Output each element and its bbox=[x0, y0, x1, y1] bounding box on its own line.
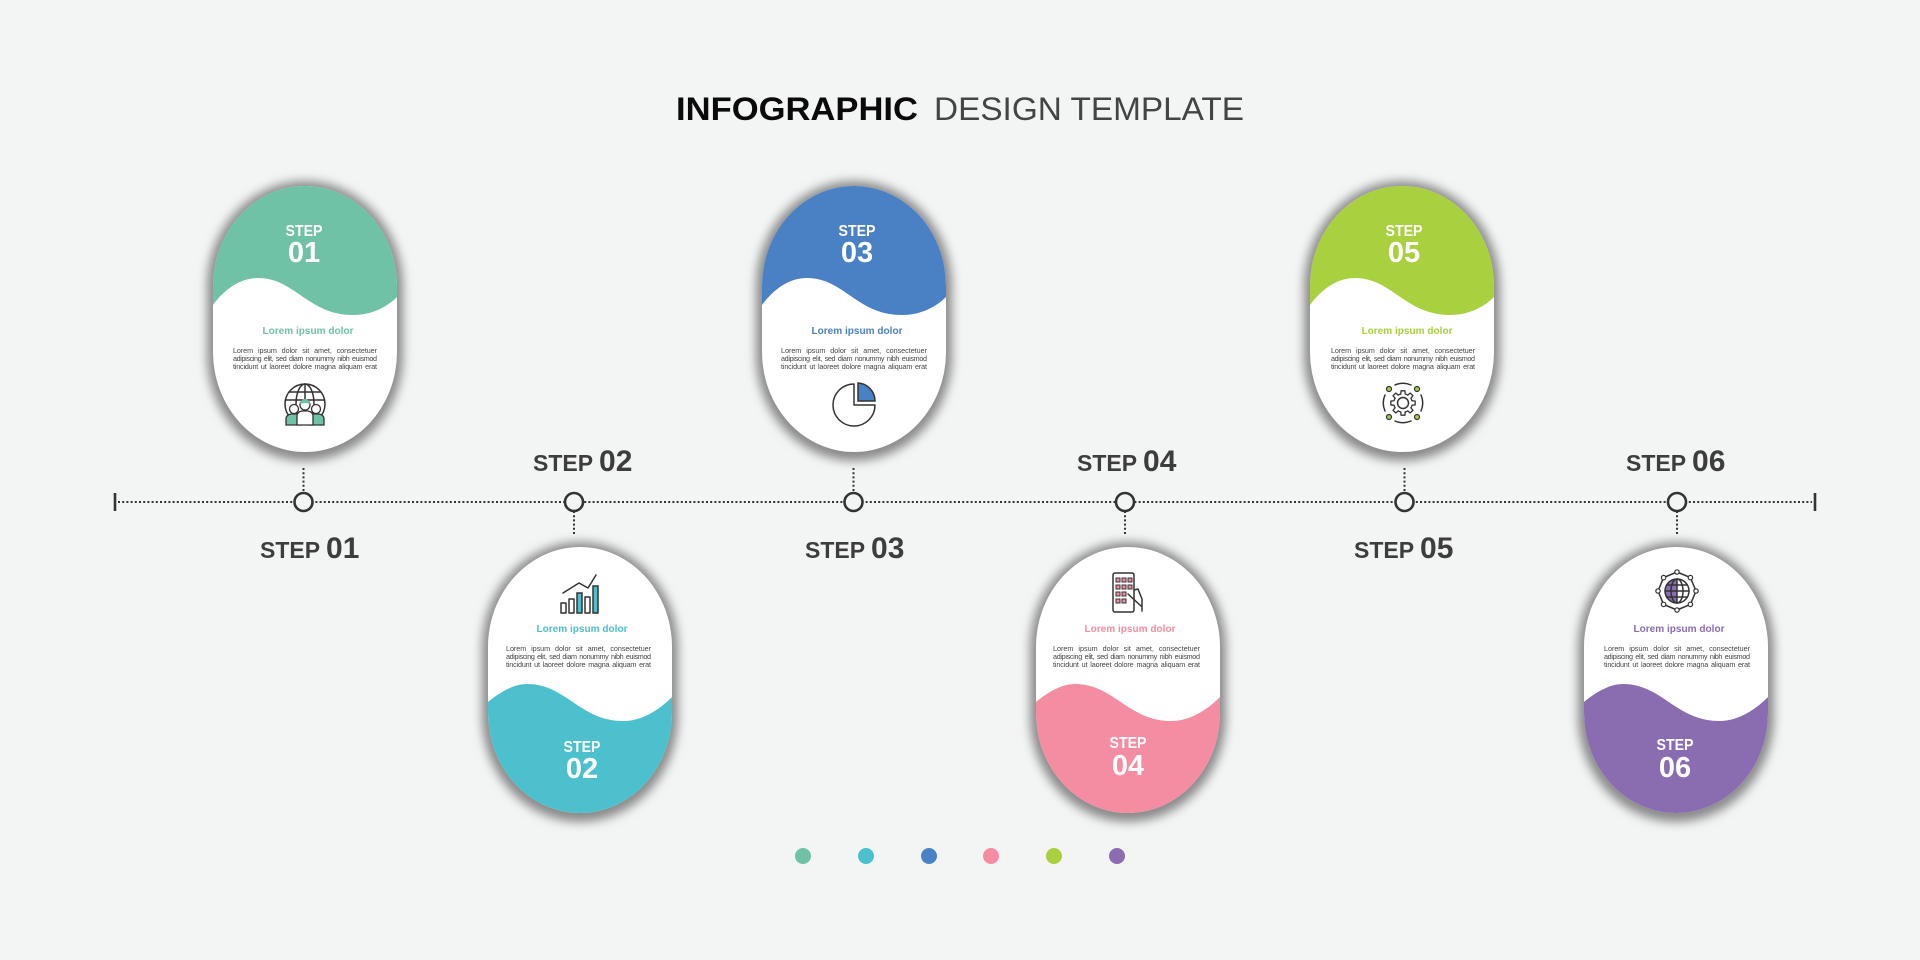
panel: step 02 card: tincidunt ut laoreet dolore magna aliquam erat bbox=[506, 660, 651, 669]
icon: pie chart bbox=[833, 383, 875, 426]
legend dots bbox=[795, 848, 1125, 864]
panel: step 03 card: 03 bbox=[841, 237, 873, 269]
timeline label: step 06: STEP 06 bbox=[1626, 445, 1725, 478]
panel: step 01 card: STEP bbox=[286, 223, 323, 240]
panel: step 04 card: tincidunt ut laoreet dolore magna aliquam erat bbox=[1053, 660, 1200, 669]
panel: step 04 card: Lorem ipsum dolor bbox=[1084, 623, 1176, 635]
panel: step 04 card: Lorem ipsum dolor sit amet, consectetuer bbox=[1053, 644, 1201, 653]
icon: gear with orbit bbox=[1383, 383, 1423, 423]
panel: step 05 card: adipiscing elit, sed diam nonummy nibh euismod bbox=[1331, 354, 1475, 363]
panel: step 02 card bbox=[482, 542, 678, 822]
panel: step 02 card: Lorem ipsum dolor bbox=[536, 623, 628, 635]
panel: step 02 card: 02 bbox=[566, 753, 598, 785]
panel: step 06 card bbox=[1578, 542, 1774, 822]
panel: step 03 card: STEP bbox=[838, 223, 876, 240]
panel: step 06 card: tincidunt ut laoreet dolore magna aliquam erat bbox=[1604, 660, 1750, 669]
panel: step 06 card: Lorem ipsum dolor bbox=[1634, 623, 1724, 635]
panel: step 02 card: STEP bbox=[564, 739, 601, 756]
title: INFOGRAPHIC bbox=[676, 91, 918, 127]
panel: step 03 card: Lorem ipsum dolor sit amet, consectetuer bbox=[781, 346, 928, 355]
timeline label: step 01: STEP 01 bbox=[260, 532, 359, 565]
panel: step 03 card: adipiscing elit, sed diam nonummy nibh euismod bbox=[781, 354, 927, 363]
timeline label: step 05: STEP 05 bbox=[1354, 532, 1453, 565]
panel: step 05 card bbox=[1304, 181, 1500, 461]
panel: step 03 card bbox=[756, 181, 952, 461]
panel: step 05 card: 05 bbox=[1388, 237, 1420, 269]
panel: step 05 card: STEP bbox=[1386, 223, 1423, 240]
panel: step 06 card: STEP bbox=[1656, 737, 1694, 754]
panel: step 01 card: 01 bbox=[288, 237, 320, 269]
title bbox=[676, 91, 1244, 127]
panel: step 02 card: adipiscing elit, sed diam nonummy nibh euismod bbox=[506, 652, 651, 661]
panel: step 01 card: Lorem ipsum dolor sit amet, consectetuer bbox=[233, 346, 378, 355]
panel: step 06 card: adipiscing elit, sed diam nonummy nibh euismod bbox=[1604, 652, 1750, 661]
panel: step 04 card: 04 bbox=[1112, 750, 1144, 782]
timeline label: step 02: STEP 02 bbox=[533, 445, 632, 478]
panel: step 05 card: tincidunt ut laoreet dolore magna aliquam erat bbox=[1331, 362, 1475, 371]
icon: bar chart bbox=[561, 575, 598, 613]
timeline label: step 03: STEP 03 bbox=[805, 532, 904, 565]
panel: step 01 card: adipiscing elit, sed diam nonummy nibh euismod bbox=[233, 354, 377, 363]
panel: step 04 card: adipiscing elit, sed diam nonummy nibh euismod bbox=[1053, 652, 1200, 661]
panel: step 03 card: tincidunt ut laoreet dolore magna aliquam erat bbox=[781, 362, 927, 371]
icon: globe network bbox=[1656, 570, 1698, 612]
panel: step 06 card: Lorem ipsum dolor sit amet, consectetuer bbox=[1604, 644, 1751, 653]
timeline bbox=[115, 468, 1815, 536]
panel: step 01 card: Lorem ipsum dolor bbox=[262, 325, 354, 337]
panel: step 04 card bbox=[1030, 542, 1226, 822]
panel: step 03 card: Lorem ipsum dolor bbox=[812, 325, 902, 337]
panel: step 06 card: 06 bbox=[1659, 752, 1691, 784]
title: DESIGN TEMPLATE bbox=[934, 91, 1244, 127]
timeline label: step 04: STEP 04 bbox=[1077, 445, 1177, 478]
panel: step 02 card: Lorem ipsum dolor sit amet, consectetuer bbox=[506, 644, 652, 653]
panel: step 05 card: Lorem ipsum dolor sit amet, consectetuer bbox=[1331, 346, 1476, 355]
icon: globe with people bbox=[285, 384, 325, 425]
panel: step 01 card: tincidunt ut laoreet dolore magna aliquam erat bbox=[233, 362, 377, 371]
panel: step 04 card: STEP bbox=[1110, 735, 1147, 752]
panel: step 05 card: Lorem ipsum dolor bbox=[1362, 325, 1452, 337]
icon: phone keypad in hand bbox=[1113, 573, 1142, 612]
panel: step 01 card bbox=[207, 181, 403, 461]
